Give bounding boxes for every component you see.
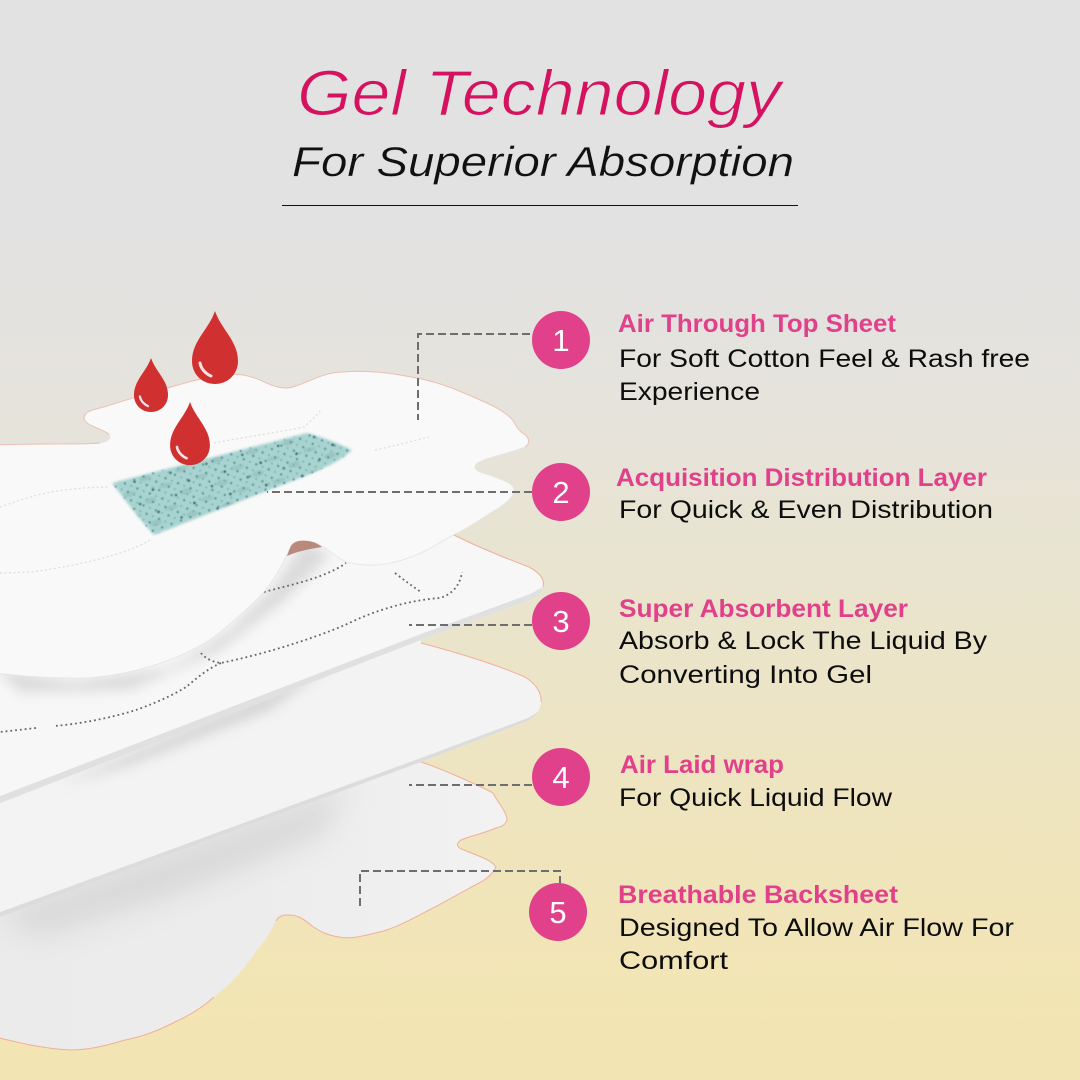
layer 3: super absorbent layer <box>0 530 545 807</box>
text 5: Designed To Allow Air Flow For <box>619 914 1014 942</box>
callout 1: air through top sheet <box>418 310 1030 420</box>
badge 1 <box>532 311 590 369</box>
drop: large <box>192 311 238 384</box>
badge 2 <box>532 463 590 521</box>
callout 3: super absorbent layer <box>409 592 988 689</box>
leader line 1 <box>418 334 530 420</box>
text 3: Converting Into Gel <box>619 661 872 689</box>
drop: small <box>134 358 168 412</box>
text 2: For Quick & Even Distribution <box>619 496 993 524</box>
callout 5: breathable backsheet <box>360 871 1014 975</box>
badge 3: 3 <box>552 604 570 639</box>
faint stitching <box>0 410 429 573</box>
text 1: Experience <box>619 378 760 406</box>
text 4: Air Laid wrap <box>620 751 784 779</box>
text 4 <box>619 751 893 812</box>
title rule <box>282 205 798 206</box>
gap between pad wings <box>287 541 322 556</box>
callout 4: air laid wrap <box>409 748 893 812</box>
stitch line on absorbent layer <box>0 563 462 732</box>
title block <box>282 57 798 206</box>
badge 1: 1 <box>552 323 570 358</box>
blood drops <box>134 311 238 465</box>
leader line 4 <box>409 784 532 786</box>
text 5 <box>618 881 1014 975</box>
badge 4 <box>532 748 590 806</box>
subtitle: For Superior Absorption: For Superior Absorption <box>292 138 794 185</box>
layers 1 and 2: top sheet pad <box>0 371 529 678</box>
layer 5: breathable backsheet <box>0 750 507 1050</box>
text 3: Super Absorbent Layer <box>619 595 908 623</box>
badge 5: 5 <box>549 895 567 930</box>
layer 4: air laid wrap <box>0 630 541 921</box>
text 1 <box>618 310 1030 406</box>
leader line 5 <box>360 871 560 910</box>
badge 2: 2 <box>552 475 570 510</box>
text 5: Comfort <box>619 947 728 975</box>
text 1: For Soft Cotton Feel & Rash free <box>619 345 1030 373</box>
text 3: Absorb & Lock The Liquid By <box>619 627 988 655</box>
title: Gel Technology: Gel Technology <box>297 57 785 129</box>
text 3 <box>619 595 988 689</box>
callout 2: acquisition distribution layer <box>267 463 993 524</box>
text 2: Acquisition Distribution Layer <box>616 464 987 492</box>
badge 3 <box>532 592 590 650</box>
leader line 3 <box>409 624 532 626</box>
text 5: Breathable Backsheet <box>618 881 899 909</box>
badge 4: 4 <box>552 760 570 795</box>
text 1: Air Through Top Sheet <box>618 310 897 338</box>
text 2 <box>616 464 993 524</box>
illustration: exploded sanitary pad layers <box>0 371 545 1050</box>
leader line 2 <box>267 491 532 493</box>
text 4: For Quick Liquid Flow <box>619 784 893 812</box>
peach rim of pad <box>0 371 529 447</box>
drop: medium <box>170 402 210 465</box>
absorbent teal acquisition layer <box>112 433 352 535</box>
badge 5 <box>529 883 587 941</box>
